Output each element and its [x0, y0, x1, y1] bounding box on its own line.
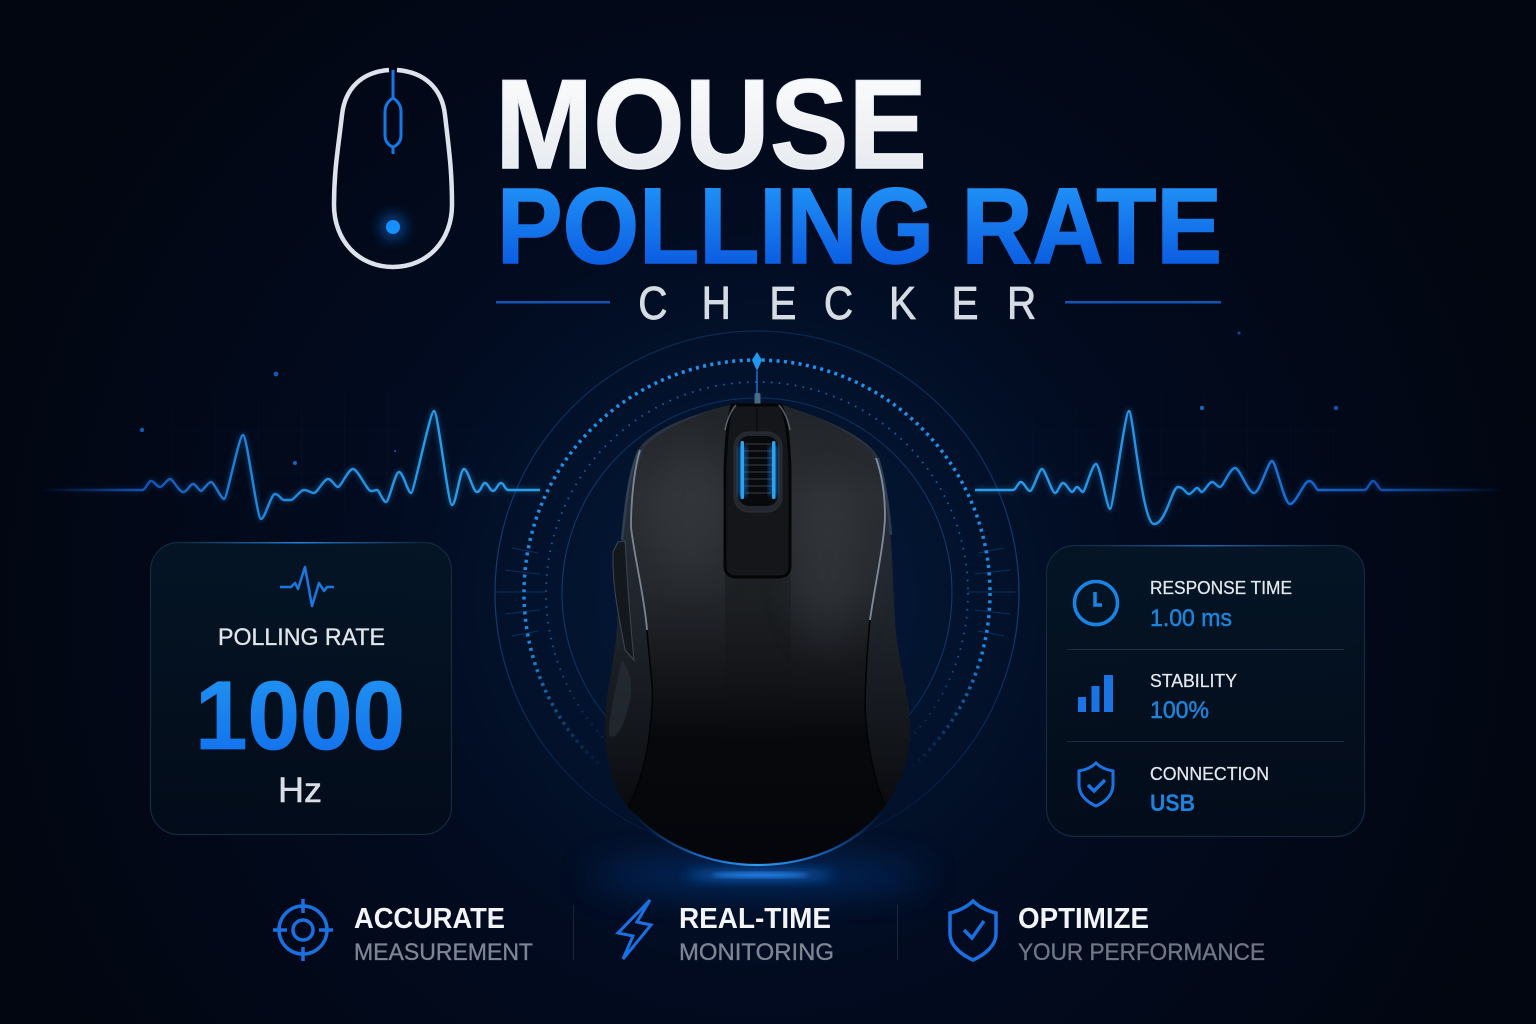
feature: accurate measurement: ACCURATE	[354, 903, 505, 935]
value: 1000: 1000	[195, 661, 405, 770]
metric: stability	[1150, 670, 1237, 724]
shell seam right	[870, 458, 885, 620]
title line: POLLING RATE: POLLING RATE	[497, 165, 1222, 286]
subtitle: CHECKER: CHECKER	[638, 279, 1036, 330]
feature: accurate measurement	[273, 899, 533, 966]
feature: optimize performance: YOUR PERFORMANCE	[1018, 939, 1265, 966]
icon: signal bars	[1078, 675, 1113, 712]
outer edge sheen	[622, 450, 891, 540]
metric: connection: USB	[1150, 790, 1195, 817]
grip highlight	[609, 660, 631, 737]
title line: MOUSE: MOUSE	[495, 53, 927, 195]
feature strip	[273, 899, 1265, 966]
metric: connection: CONNECTION	[1150, 763, 1269, 784]
side buttons	[613, 541, 634, 660]
mouse top shell	[628, 405, 885, 866]
unit: Hz: Hz	[278, 771, 322, 810]
metric: stability: STABILITY	[1150, 670, 1237, 691]
glow under mouse	[588, 864, 928, 888]
icon: mouse outline logo	[334, 70, 452, 267]
channel top highlights	[725, 405, 790, 430]
mouse body	[605, 405, 910, 865]
metric: response time: 1.00 ms	[1150, 605, 1232, 632]
feature: optimize performance	[950, 901, 1265, 966]
feature: real-time monitoring: MONITORING	[679, 939, 834, 966]
feature: optimize performance: OPTIMIZE	[1018, 903, 1149, 935]
icon: target	[273, 899, 333, 961]
feature: accurate measurement: MEASUREMENT	[354, 939, 533, 966]
gauge pointer	[752, 352, 762, 409]
left waveform	[40, 372, 540, 519]
icon: shield check large	[950, 901, 996, 960]
icon: shield check	[1079, 763, 1113, 806]
metric: connection	[1150, 763, 1269, 817]
button channel	[725, 405, 790, 577]
icon: clock	[1074, 582, 1118, 624]
scroll wheel	[734, 432, 782, 512]
feature: real-time monitoring: REAL-TIME	[679, 903, 831, 935]
shell seam left	[631, 450, 647, 630]
title	[495, 53, 1222, 330]
panel: metrics	[1046, 545, 1364, 836]
subtitle rule right	[1065, 301, 1221, 304]
radial gauge rings	[495, 331, 1019, 855]
metric: response time	[1150, 577, 1292, 632]
metric: stability: 100%	[1150, 697, 1209, 724]
panel: polling rate	[150, 542, 452, 834]
right waveform	[975, 332, 1505, 524]
metric: response time: RESPONSE TIME	[1150, 577, 1292, 598]
glowing bottom rim	[632, 812, 882, 865]
subtitle rule left	[496, 301, 610, 304]
icon: lightning bolt	[618, 900, 651, 959]
central mouse illustration	[605, 405, 910, 866]
feature: real-time monitoring	[618, 900, 834, 966]
icon: pulse	[280, 567, 334, 606]
label: polling rate: POLLING RATE	[218, 624, 385, 651]
